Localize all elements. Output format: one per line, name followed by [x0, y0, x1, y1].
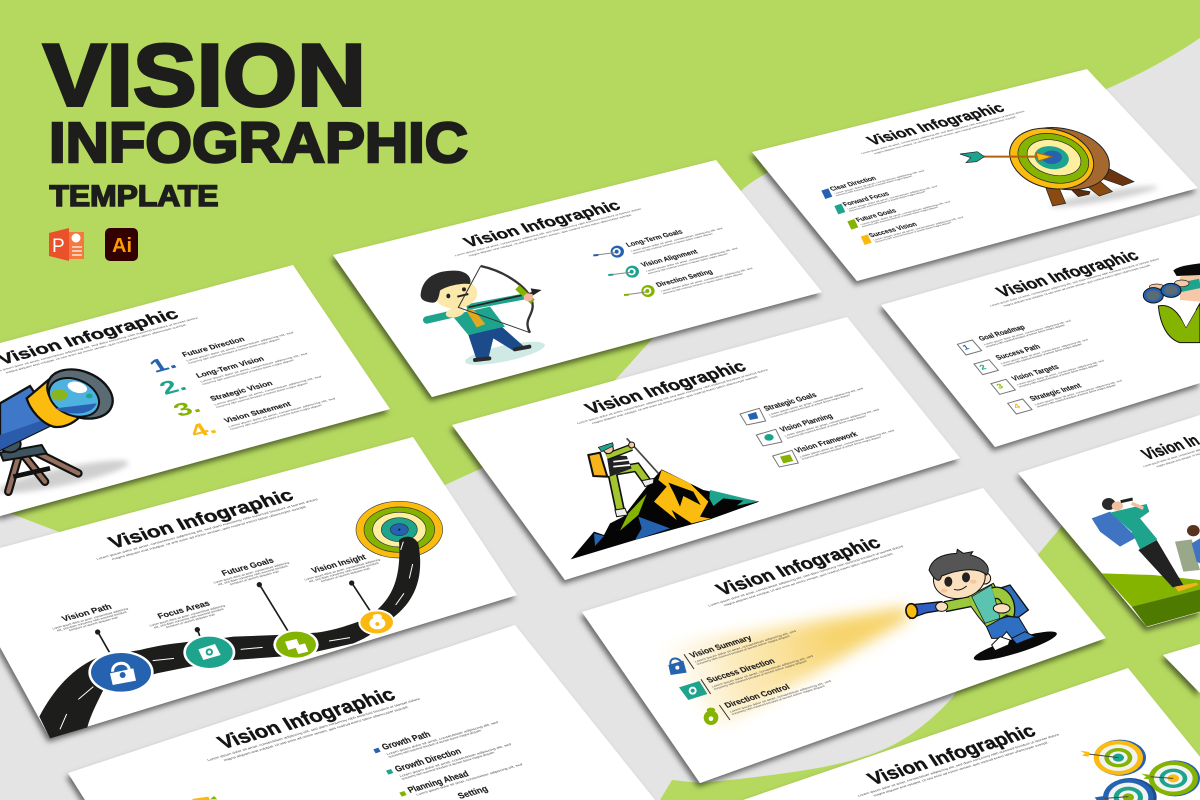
item: Long-Term Goals: Long-Term Goals [624, 228, 685, 248]
item: Clear Direction: Clear Direction [828, 174, 878, 192]
label: Focus Areas: Lorem ipsum dolor sit amet, consectetuer adipiscing [149, 604, 226, 627]
item: Vision Summary: Vision Summary [688, 633, 754, 659]
label: Vision Insight [299, 550, 384, 587]
item: Long-Term Vision: Long-Term Vision [194, 355, 266, 379]
item: Vision Alignment: nonummy nibh euismod tincidunt ut laoreet dolore magna aliquam [647, 252, 729, 275]
heading: archer slide title: magna aliquam erat volutpat. Ut wisi enim ad minim veniam, quis nostrud exerci tation ullamcorper suscipit. [468, 213, 633, 257]
item: Success Path: Lorem ipsum dolor sit amet, consectetuer adipiscing elit, sed [1000, 338, 1089, 365]
item: Long-Term Vision: Lorem ipsum dolor sit amet, consectetuer adipiscing elit, sed [200, 352, 308, 383]
item: Goal Roadmap [977, 311, 1074, 348]
item: Vision Planning: nonummy nibh euismod tincidunt ut laoreet dolore magna aliquam [786, 414, 867, 440]
panel: telescope slide [0, 265, 390, 516]
icon: flashlight item icons [668, 654, 730, 725]
label: Vision Insight: Vision Insight [310, 553, 368, 575]
item: Vision Framework [793, 421, 897, 461]
label: Future Goals: elit, sed diam nonummy nibh euismod tincidunt [217, 564, 288, 586]
illustration: archery target [960, 119, 1158, 211]
item: Strategic Vision: Lorem ipsum dolor sit amet, consectetuer adipiscing elit, sed [214, 375, 322, 406]
panel: flashlight slide [582, 488, 1106, 783]
heading: target slide title: Vision Infographic [863, 100, 1008, 148]
heading: mountain slide title: Vision Infographic [581, 358, 750, 418]
icon: PowerPoint: P [52, 236, 65, 257]
item: Vision Alignment: Lorem ipsum dolor sit amet, consectetuer adipiscing elit, sed [645, 247, 739, 273]
item: Direction Control: nonummy nibh euismod tincidunt ut laoreet dolore magna aliquam [731, 684, 826, 716]
heading: target slide title: magna aliquam erat volutpat. Ut wisi enim ad minim veniam, quis nostrud exerci tation ullamcorper suscipit. [873, 115, 1018, 155]
illustration: archer [421, 266, 546, 370]
heading: telescope slide title: Vision Infographic [0, 306, 182, 368]
icon: growth bullets and partial illustration [192, 748, 407, 800]
label: Focus Areas: tincidunt ut laoreet aliquam erat [165, 613, 216, 629]
item: Forward Focus [841, 178, 940, 212]
item: Strategic Intent [1028, 371, 1125, 408]
item: Forward Focus: nonummy nibh euismod tincidunt ut laoreet dolore magna aliquam [848, 190, 927, 212]
item: Strategic Vision: Strategic Vision [208, 379, 274, 402]
label: Vision Path: Lorem ipsum dolor sit amet, consectetuer adipiscing [52, 607, 129, 630]
panel: partial far-right slide [1163, 644, 1200, 693]
panel: archer slide [333, 160, 822, 397]
item: Success Direction [705, 646, 816, 691]
panel: growth slide [68, 625, 655, 800]
panel: multi target slide [743, 668, 1200, 800]
label: Focus Areas: elit, sed diam nonummy nibh euismod tincidunt [153, 607, 224, 629]
item: Strategic Intent: nonummy nibh euismod tincidunt ut laoreet dolore magna aliquam [1036, 383, 1117, 408]
icon: Illustrator: Ai [112, 235, 132, 257]
item: Vision Alignment: Vision Alignment [639, 248, 699, 268]
heading: multi target slide title: Lorem ipsum dolor sit amet, consectetuer adipiscing elit, sed diam nonummy nibh euismod tincidunt ut laoreet dolore [857, 733, 1060, 798]
illustration: climber on mountain [571, 438, 759, 559]
item: numbers: 3. [169, 396, 205, 421]
label: Vision Path: Vision Path [60, 603, 114, 624]
item: Goal Roadmap: Goal Roadmap [977, 323, 1027, 342]
item: Vision Targets: Vision Targets [1010, 363, 1061, 382]
heading: mountain slide title: magna aliquam erat volutpat. Ut wisi enim ad minim veniam, quis nostrud exerci tation ullamcorper suscipit. [591, 375, 759, 425]
item: Future Goals [854, 194, 953, 228]
icon: PowerPoint [49, 228, 84, 261]
item: Vision Targets: nonummy nibh euismod tincidunt ut laoreet dolore magna aliquam [1018, 363, 1099, 388]
item: numbers: 2. [155, 374, 191, 399]
heading: archer slide title: Vision Infographic [460, 197, 624, 250]
panel: hikers slide [1018, 415, 1200, 627]
item: Direction Setting: Lorem ipsum dolor sit amet, consectetuer adipiscing elit, sed [660, 267, 754, 293]
item: Vision Statement: nonummy nibh euismod tincidunt ut laoreet dolore magna aliquam [229, 403, 323, 431]
label: Vision Insight: Lorem ipsum dolor sit amet, consectetuer adipiscing [304, 558, 381, 581]
item: Success Path [994, 330, 1091, 367]
heading: binoculars slide title: magna aliquam erat volutpat. Ut wisi enim ad minim veniam, quis nostrud exerci tation ullamcorper suscipit. [1002, 263, 1152, 308]
label: box numbers [960, 343, 1022, 410]
item: Growth Direction [393, 734, 514, 781]
item: numbers: 4. [185, 417, 221, 442]
label: box numbers: 4 [1011, 402, 1022, 410]
heading: growth slide title: Vision Infographic [213, 684, 399, 753]
item: Vision Statement: Vision Statement [222, 400, 292, 424]
item: Vision Targets [1010, 351, 1107, 388]
step: blue lock [88, 651, 154, 694]
background: bottom right green shape [660, 480, 1200, 800]
item: Long-Term Goals: Lorem ipsum dolor sit amet, consectetuer adipiscing elit, sed [630, 227, 724, 253]
item: Forward Focus: Lorem ipsum dolor sit amet, consectetuer adipiscing elit, sed [846, 184, 939, 210]
illustration: light beam [657, 607, 908, 727]
heading: binoculars slide title: Lorem ipsum dolor sit amet, consectetuer adipiscing elit, sed diam nonummy nibh euismod tincidunt ut laoreet dolore [989, 257, 1161, 307]
panel: mountain slide [452, 317, 960, 580]
item: Growth Path [380, 712, 501, 759]
item: Future Direction: Lorem ipsum dolor sit amet, consectetuer adipiscing elit, sed [186, 331, 294, 362]
illustration: three targets [1080, 740, 1200, 800]
item: Strategic Vision [208, 367, 324, 409]
item: Direction Setting: nonummy nibh euismod tincidunt ut laoreet dolore magna aliquam [662, 272, 744, 295]
item: Direction Control [723, 671, 834, 716]
item: Strategic Intent: Lorem ipsum dolor sit amet, consectetuer adipiscing elit, sed [1034, 379, 1123, 406]
item: Clear Direction: Lorem ipsum dolor sit amet, consectetuer adipiscing elit, sed [833, 169, 926, 195]
item: Planning Ahead: Planning Ahead [406, 770, 471, 795]
item: numbers: 1. [145, 352, 181, 377]
item: Direction Setting [654, 258, 755, 295]
label: Focus Areas: Focus Areas [156, 599, 212, 621]
label: Focus Areas [144, 596, 229, 633]
item: Growth Path: Lorem ipsum dolor sit amet, consectetuer adipiscing elit, sed [386, 721, 499, 756]
step: yellow gear [358, 609, 395, 635]
heading: telescope slide title: magna aliquam erat volutpat. Ut wisi enim ad minim veniam, quis nostrud exerci tation ullamcorper suscipit. [5, 323, 187, 374]
label: Vision Path: elit, sed diam nonummy nibh euismod tincidunt [56, 610, 127, 632]
heading: flashlight slide title: Lorem ipsum dolor sit amet, consectetuer adipiscing elit, sed diam nonummy nibh euismod tincidunt ut laoreet dolore [707, 545, 904, 607]
item: Forward Focus: Forward Focus [841, 190, 891, 208]
item: Direction Control: Direction Control [723, 683, 792, 709]
label: box numbers: 1 [960, 343, 971, 351]
illustration: boy with flashlight [905, 549, 1059, 666]
item: Success Direction: Success Direction [705, 657, 777, 684]
item: Goal Roadmap: nonummy nibh euismod tincidunt ut laoreet dolore magna aliquam [985, 323, 1066, 348]
panel: binoculars slide [881, 215, 1200, 447]
item: Growth Path: Growth Path [380, 730, 433, 752]
heading: binoculars slide title: Vision Infographic [992, 247, 1142, 300]
item: Vision Summary [688, 621, 799, 666]
illustration: telescope [0, 360, 130, 499]
item: Goal Roadmap: Lorem ipsum dolor sit amet, consectetuer adipiscing elit, sed [983, 319, 1072, 346]
item: Future Goals: Lorem ipsum dolor sit amet, consectetuer adipiscing elit, sed [859, 200, 952, 226]
item: Long-Term Goals: nonummy nibh euismod tincidunt ut laoreet dolore magna aliquam [632, 232, 714, 255]
item: Long-Term Goals [624, 218, 725, 255]
icon: colour bars [821, 188, 872, 245]
icon: Illustrator [105, 228, 138, 261]
illustration: person with binoculars [1143, 263, 1200, 343]
subtitle: Template: TEMPLATE [50, 180, 218, 213]
item: Vision Framework: Vision Framework [793, 430, 859, 454]
item: Strategic Goals: nonummy nibh euismod tincidunt ut laoreet dolore magna aliquam [770, 393, 851, 419]
item: Direction Control: Lorem ipsum dolor sit amet, consectetuer adipiscing elit, sed [729, 679, 832, 713]
label: Vision Insight: elit, sed diam nonummy nibh euismod tincidunt [308, 561, 379, 583]
item: Vision Planning: Vision Planning [778, 412, 834, 433]
title: Infographic: INFOGRAPHIC [49, 111, 468, 175]
item: Vision Framework: Lorem ipsum dolor sit amet, consectetuer adipiscing elit, sed [799, 429, 895, 458]
item: Vision Summary: Lorem ipsum dolor sit amet, consectetuer adipiscing elit, sed [694, 629, 797, 663]
item: Success Vision: Lorem ipsum dolor sit amet, consectetuer adipiscing elit, sed [872, 215, 965, 241]
item: Vision Framework: nonummy nibh euismod tincidunt ut laoreet dolore magna aliquam [801, 435, 882, 461]
background: top green shape [0, 0, 1200, 533]
item: Growth Direction: Lorem ipsum dolor sit amet, consectetuer adipiscing elit, sed [399, 743, 512, 778]
heading: flashlight slide title: magna aliquam erat volutpat. Ut wisi enim ad minim veniam, quis nostrud exerci tation ullamcorper suscipit. [723, 552, 894, 607]
heading: growth slide title: magna aliquam erat volutpat. Ut wisi enim ad minim veniam, quis nostrud exerci tation ullamcorper suscipit. [223, 705, 410, 762]
item: Clear Direction [828, 163, 927, 197]
item: Future Goals: nonummy nibh euismod tincidunt ut laoreet dolore magna aliquam [861, 205, 940, 228]
item: Strategic Goals: Strategic Goals [762, 391, 818, 412]
item: Clear Direction: nonummy nibh euismod tincidunt ut laoreet dolore magna aliquam [835, 174, 914, 197]
item: Success Path: nonummy nibh euismod tincidunt ut laoreet dolore magna aliquam [1002, 342, 1083, 367]
item: Growth Path: nonummy nibh euismod tincidunt ut laoreet dolore magna aliquam [388, 729, 482, 759]
item: Success Vision [867, 209, 966, 243]
heading: road slide title: Vision Infographic [105, 485, 297, 552]
panel: road slide [0, 437, 517, 738]
heading: multi target slide title: Vision Infographic [864, 721, 1040, 789]
item: Planning Ahead [406, 755, 523, 798]
item: Future Direction: Future Direction [180, 335, 246, 358]
item: Vision Statement: Lorem ipsum dolor sit amet, consectetuer adipiscing elit, sed [228, 397, 336, 428]
heading: flashlight slide title: Vision Infographic [712, 533, 885, 599]
label: Vision Insight: tincidunt ut laoreet aliquam erat [320, 567, 371, 583]
item: Success Vision: Success Vision [867, 221, 919, 239]
item: Future Direction: nonummy nibh euismod tincidunt ut laoreet dolore magna aliquam [187, 337, 281, 365]
item: Vision Planning: Lorem ipsum dolor sit amet, consectetuer adipiscing elit, sed [784, 408, 880, 437]
label: box numbers: 2 [977, 363, 988, 371]
item: Growth Direction: Growth Direction [393, 747, 463, 774]
label: Vision Path: tincidunt ut laoreet aliquam erat [68, 616, 119, 632]
icon: small targets [593, 246, 655, 297]
label: Future Goals: Future Goals [220, 556, 276, 578]
item: Long-Term Vision [194, 344, 310, 386]
item: Strategic Vision: nonummy nibh euismod tincidunt ut laoreet dolore magna aliquam [215, 381, 309, 409]
illustration: road to target [39, 501, 443, 738]
item: Success Direction: nonummy nibh euismod tincidunt ut laoreet dolore magna aliquam [713, 659, 808, 691]
label: box numbers: 3 [994, 382, 1005, 390]
item: Long-Term Vision: nonummy nibh euismod tincidunt ut laoreet dolore magna aliquam [201, 358, 295, 386]
item: Success Direction: Lorem ipsum dolor sit amet, consectetuer adipiscing elit, sed [711, 654, 814, 688]
item: Strategic Intent: Strategic Intent [1028, 382, 1083, 402]
heading: road slide title: magna aliquam erat volutpat. Ut wisi enim ad minim veniam, quis nostrud exerci tation ullamcorper suscipit. [111, 505, 307, 561]
label: Future Goals: tincidunt ut laoreet aliquam erat [229, 570, 280, 586]
item: Future Goals: Future Goals [854, 207, 898, 223]
item: Success Path: Success Path [994, 343, 1042, 361]
item: Vision Summary: nonummy nibh euismod tincidunt ut laoreet dolore magna aliquam [696, 634, 791, 666]
label: Future Goals [208, 553, 293, 590]
item: Growth Direction: nonummy nibh euismod tincidunt ut laoreet dolore magna aliquam [401, 751, 495, 781]
item: Vision Planning [778, 400, 882, 440]
item: Vision Alignment [639, 238, 740, 275]
illustration: hikers [1092, 498, 1200, 627]
step: teal safe [183, 635, 235, 670]
item: Strategic Goals: Lorem ipsum dolor sit amet, consectetuer adipiscing elit, sed [768, 387, 864, 416]
heading: mountain slide title: Lorem ipsum dolor sit amet, consectetuer adipiscing elit, sed diam nonummy nibh euismod tincidunt ut laoreet dolore [576, 368, 769, 425]
item: Direction Setting: Direction Setting [654, 268, 714, 288]
item: Success Vision: nonummy nibh euismod tincidunt ut laoreet dolore magna aliquam [874, 221, 953, 243]
label: Future Goals: Lorem ipsum dolor sit amet, consectetuer adipiscing [213, 561, 290, 584]
panel: target slide [752, 69, 1198, 281]
item: Planning Ahead: Lorem ipsum dolor sit amet, consectetuer adipiscing elit, sed [415, 763, 523, 796]
item: Vision Statement [222, 389, 338, 431]
item: Strategic Goals [762, 379, 866, 419]
heading: target slide title: Lorem ipsum dolor sit amet, consectetuer adipiscing elit, sed diam nonummy nibh euismod tincidunt ut laoreet dolore [860, 110, 1026, 155]
item: numbers [145, 352, 221, 442]
heading: archer slide title: Lorem ipsum dolor sit amet, consectetuer adipiscing elit, sed diam nonummy nibh euismod tincidunt ut laoreet dolore [454, 207, 643, 257]
heading: growth slide title: Lorem ipsum dolor sit amet, consectetuer adipiscing elit, sed diam nonummy nibh euismod tincidunt ut laoreet dolore [206, 697, 421, 762]
heading: road slide title: Lorem ipsum dolor sit amet, consectetuer adipiscing elit, sed diam nonummy nibh euismod tincidunt ut laoreet dolore [96, 498, 319, 561]
label: Vision Path [47, 599, 132, 636]
title: Vision: VISION [43, 26, 366, 124]
icon: item squares [740, 408, 798, 467]
item: Future Direction [180, 323, 296, 365]
heading: multi target slide title: magna aliquam erat volutpat. Ut wisi enim ad minim veniam, quis nostrud exerci tation ullamcorper suscipit. [873, 741, 1049, 797]
heading: hikers slide title [1130, 430, 1200, 471]
icon: numbered boxes [957, 340, 1032, 414]
item: Vision Targets: Lorem ipsum dolor sit amet, consectetuer adipiscing elit, sed [1016, 359, 1105, 386]
step: green chat [273, 630, 319, 660]
